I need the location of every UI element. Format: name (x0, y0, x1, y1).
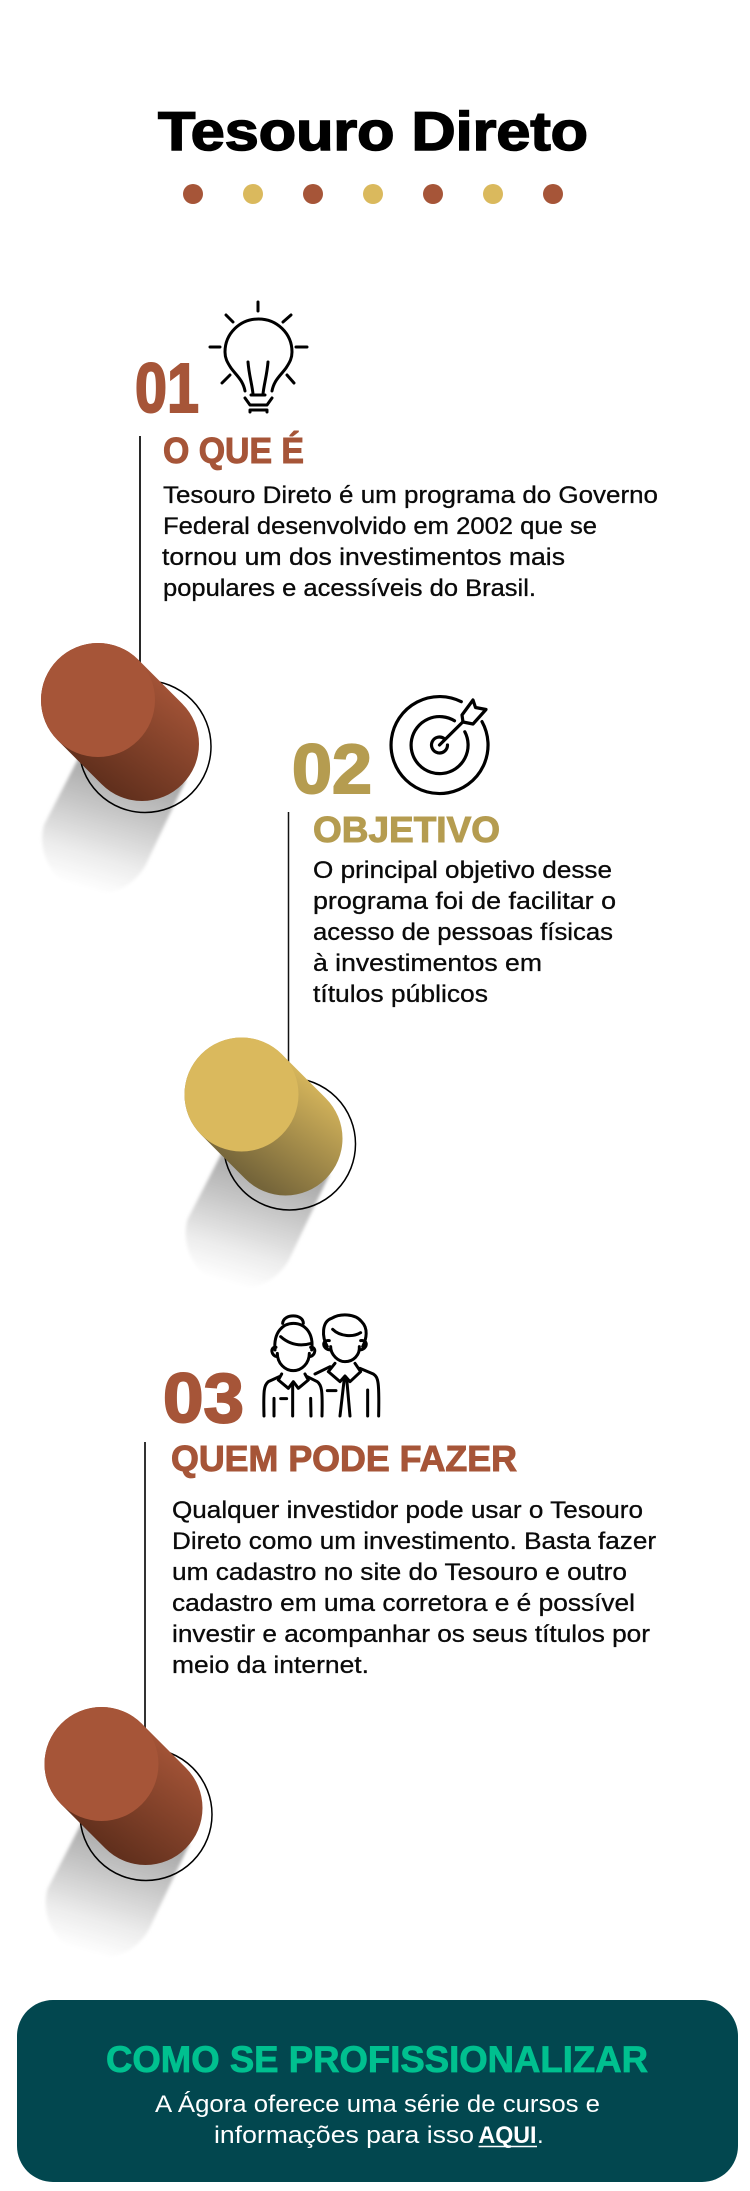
body text: tornou um dos investimentos mais (162, 544, 565, 571)
body text: programa foi de facilitar o (313, 888, 616, 915)
footer background (17, 2000, 738, 2182)
body text (162, 482, 658, 602)
pin 3 (44, 1707, 212, 1958)
dots row (183, 184, 563, 204)
footer text: informações para isso (214, 2122, 474, 2149)
body text: um cadastro no site do Tesouro e outro (172, 1559, 627, 1586)
icon: light bulb (210, 302, 307, 412)
number 02: 02 (292, 730, 372, 808)
pin 2 (184, 1038, 356, 1288)
body text (172, 1497, 656, 1679)
body text: Tesouro Direto é um programa do Governo (163, 482, 658, 509)
body text: Direto como um investimento. Basta fazer (172, 1528, 656, 1555)
title: Tesouro Direto (158, 100, 588, 162)
body text: Qualquer investidor pode usar o Tesouro (172, 1497, 643, 1524)
number 01: 01 (135, 349, 199, 427)
body text (313, 857, 616, 1008)
footer heading: COMO SE PROFISSIONALIZAR (106, 2039, 648, 2080)
body text: títulos públicos (313, 981, 488, 1008)
heading: OBJETIVO (313, 809, 500, 850)
footer text: . (537, 2122, 544, 2149)
footer text (155, 2091, 600, 2149)
number 03: 03 (163, 1359, 244, 1437)
body text: à investimentos em (313, 950, 542, 977)
panel: objetivo (292, 697, 616, 1008)
heading: O QUE É (163, 430, 304, 471)
connector line 3 (144, 1442, 146, 1735)
panel: quem pode fazer (163, 1315, 656, 1679)
footer text: AQUI (478, 2122, 536, 2149)
body text: Federal desenvolvido em 2002 que se (163, 513, 597, 540)
body text: meio da internet. (172, 1652, 369, 1679)
connector line 1 (139, 436, 141, 665)
connector line 2 (288, 812, 290, 1065)
panel: o que é (135, 302, 658, 602)
panel: footer call to action (17, 2000, 738, 2182)
footer text: A Ágora oferece uma série de cursos e (155, 2091, 600, 2118)
icon: people (264, 1315, 379, 1416)
body text: cadastro em uma corretora e é possível (172, 1590, 635, 1617)
pin 1 (41, 643, 211, 894)
body text: O principal objetivo desse (313, 857, 612, 884)
body text: acesso de pessoas físicas (313, 919, 613, 946)
body text: investir e acompanhar os seus títulos por (172, 1621, 650, 1648)
body text: populares e acessíveis do Brasil. (163, 575, 536, 602)
heading: QUEM PODE FAZER (171, 1438, 517, 1479)
icon: target (391, 697, 488, 794)
